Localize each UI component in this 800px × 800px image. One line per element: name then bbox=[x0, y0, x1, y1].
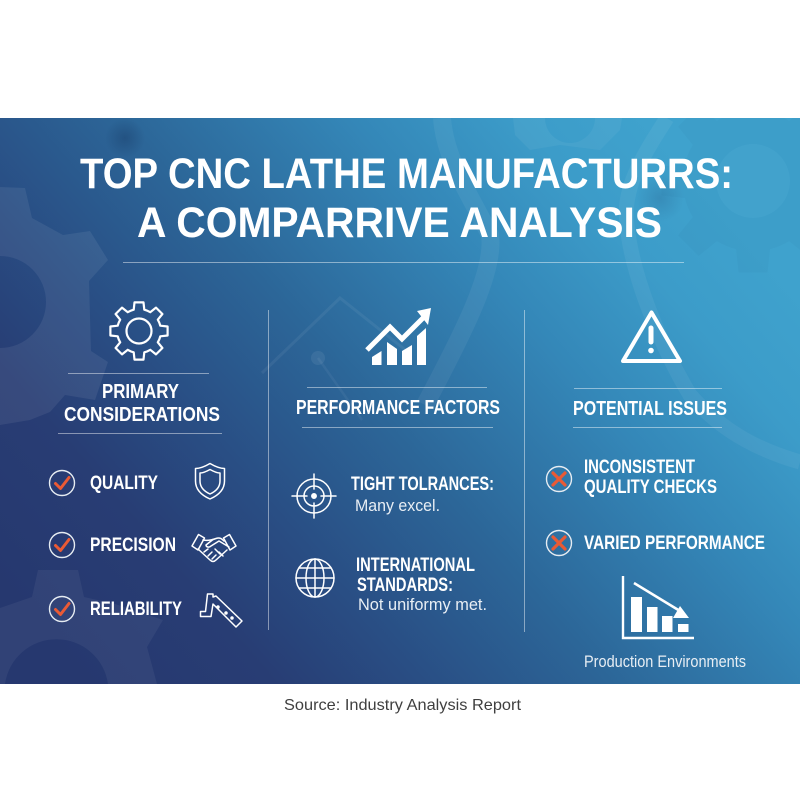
item: reliability bbox=[50, 596, 182, 622]
text: tight tolerances bbox=[351, 474, 494, 515]
text: international standards: STANDARDS: bbox=[357, 575, 453, 596]
item: reliability: RELIABILITY bbox=[90, 599, 182, 620]
heading: potential issues: POTENTIAL ISSUES bbox=[573, 398, 727, 420]
icon: warning triangle bbox=[623, 312, 680, 361]
item: quality bbox=[50, 470, 158, 496]
item: inconsistent quality checks: QUALITY CHECKS bbox=[584, 477, 717, 498]
title: TOP CNC LATHE MANUFACTURRS: bbox=[80, 150, 733, 198]
heading: primary considerations: CONSIDERATIONS bbox=[64, 404, 220, 426]
icon: declining bar chart bbox=[623, 576, 694, 638]
text: international standards: Not uniformy met. bbox=[358, 595, 487, 614]
text: tight tolerances: TIGHT TOLRANCES: bbox=[351, 474, 494, 495]
panel: primary considerations bbox=[50, 302, 242, 627]
icon: globe bbox=[296, 559, 334, 597]
item: precision bbox=[50, 532, 176, 558]
heading: primary considerations: PRIMARY bbox=[102, 381, 180, 403]
text: tight tolerances: Many excel. bbox=[355, 496, 440, 515]
title: A COMPARRIVE ANALYSIS bbox=[137, 199, 662, 247]
icon: gear bbox=[110, 302, 168, 360]
item: quality: QUALITY bbox=[90, 473, 158, 494]
item: precision: PRECISION bbox=[90, 535, 176, 556]
icon: rising bar chart bbox=[367, 308, 431, 365]
panel: performance factors bbox=[292, 308, 500, 614]
icon: handshake bbox=[192, 534, 236, 562]
title bbox=[80, 150, 733, 247]
panel: blue gradient background bbox=[0, 89, 800, 684]
source note: Source: Industry Analysis Report bbox=[284, 697, 522, 714]
icon: target bbox=[292, 474, 336, 518]
label: production environments: Production Environments bbox=[584, 652, 746, 671]
item: inconsistent quality checks bbox=[546, 457, 717, 498]
text: international standards bbox=[356, 555, 487, 614]
heading: performance factors: PERFORMANCE FACTORS bbox=[296, 397, 500, 419]
text: international standards: INTERNATIONAL bbox=[356, 555, 475, 576]
icon: lever tool bbox=[200, 594, 242, 627]
item: varied performance bbox=[546, 530, 765, 556]
infographic canvas bbox=[0, 118, 800, 714]
item: inconsistent quality checks: INCONSISTENT bbox=[584, 457, 695, 478]
icon: shield bbox=[196, 464, 224, 499]
heading: primary considerations bbox=[64, 381, 220, 426]
panel: potential issues bbox=[546, 312, 765, 671]
